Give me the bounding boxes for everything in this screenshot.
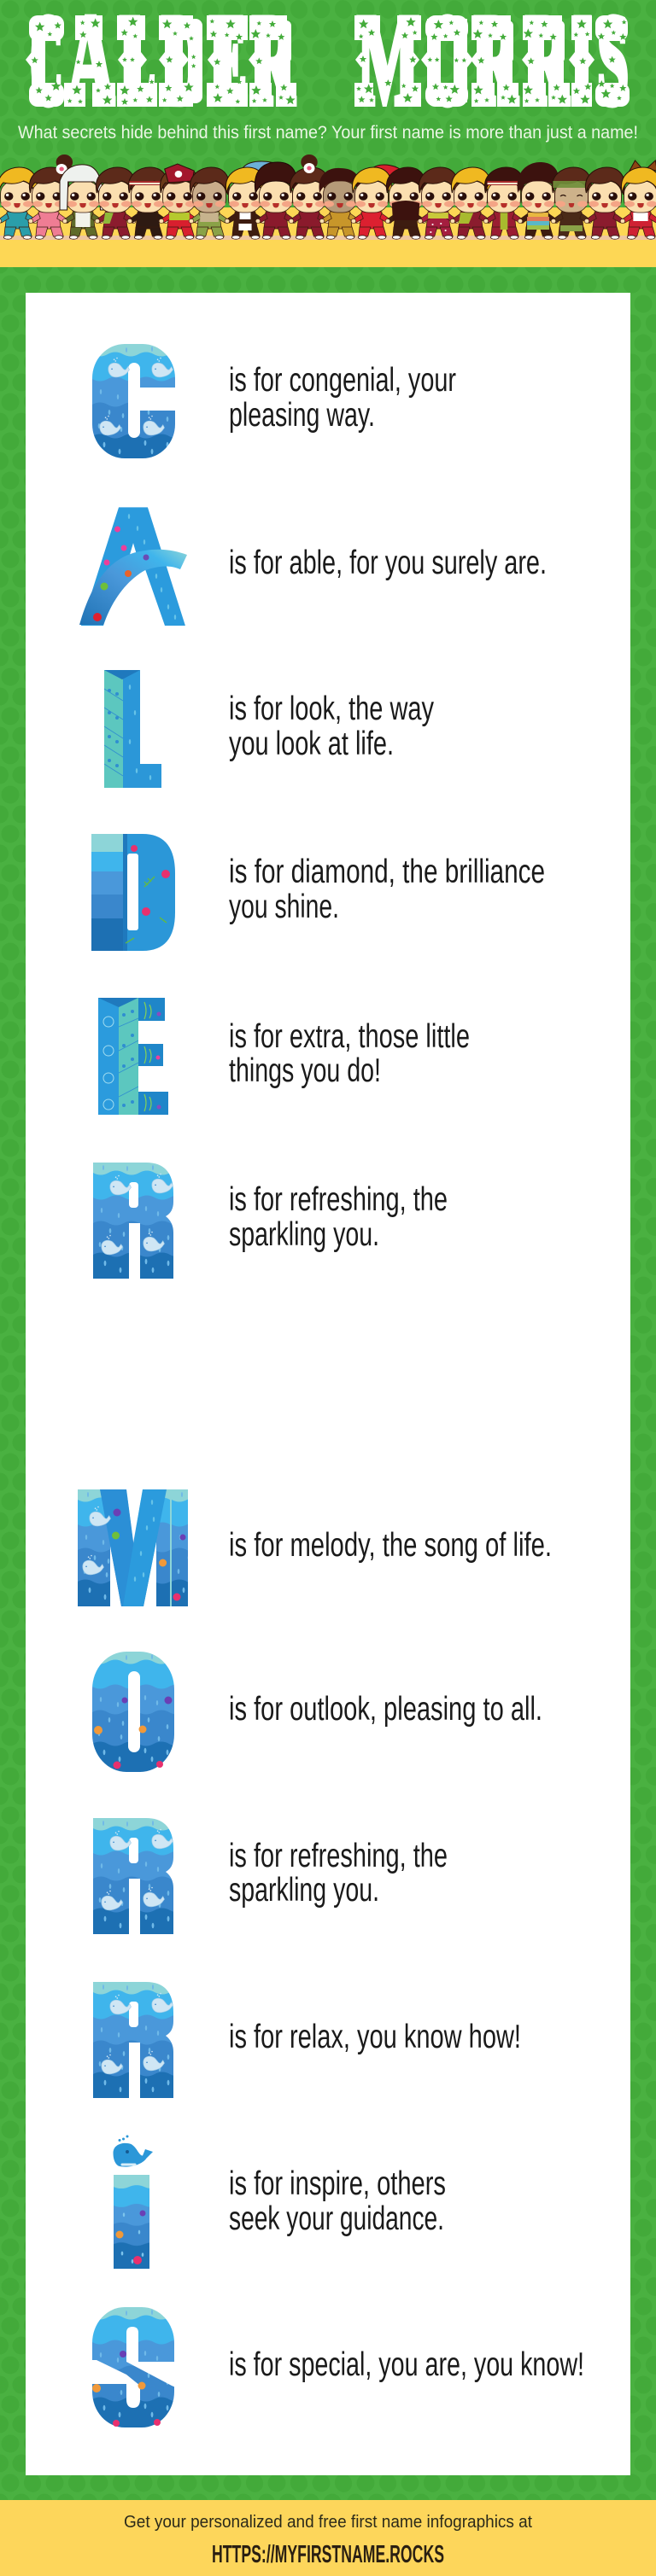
- text: R: [229, 1181, 448, 1253]
- first name: [30, 0, 296, 131]
- character 19: [584, 167, 625, 239]
- text: E: [229, 1018, 470, 1089]
- text: R second: [229, 1838, 448, 1909]
- text: D: you shine.: [229, 889, 339, 925]
- letter R (third): R: [97, 1966, 161, 2123]
- character 13: [385, 167, 426, 239]
- stem: I: [115, 2156, 148, 2290]
- character 12: [351, 165, 403, 239]
- text: R third: is for relax, you know how!: [229, 2019, 521, 2055]
- yellow band: [0, 207, 656, 267]
- text: C: [229, 362, 456, 434]
- character 20: [620, 160, 656, 239]
- floor strip: [0, 236, 656, 240]
- text: I: seek your guidance.: [229, 2200, 444, 2237]
- letter S: S: [101, 2300, 166, 2444]
- text: R second: sparkling you.: [229, 1872, 379, 1909]
- letter A: A: [83, 477, 184, 656]
- text: C: pleasing way.: [229, 397, 375, 434]
- letter L: L: [104, 668, 157, 812]
- letter R: R: [97, 1146, 161, 1303]
- text: E: things you do!: [229, 1052, 381, 1089]
- character 10: [289, 154, 330, 239]
- text: R: is for refreshing, the: [229, 1181, 448, 1218]
- title slab letter forms: [26, 15, 630, 107]
- character 18: [551, 167, 592, 239]
- text: O: is for outlook, pleasing to all.: [229, 1691, 542, 1728]
- banner: parade of characters: [0, 154, 656, 267]
- text: I: is for inspire, others: [229, 2165, 446, 2202]
- letter R (second): R: [97, 1802, 161, 1959]
- text: E: is for extra, those little: [229, 1018, 470, 1055]
- letter I with whale dot: [113, 2136, 153, 2290]
- text: L: [229, 691, 434, 762]
- text: I: [229, 2165, 446, 2237]
- text: A: is for able, for you surely are.: [229, 545, 547, 581]
- footer band: [0, 2500, 656, 2576]
- letter M: M: [76, 1461, 190, 1637]
- character 15: [450, 167, 491, 239]
- main white panel: [26, 293, 630, 2475]
- footer line: Get your personalized and free first name infographics at: [124, 2513, 532, 2532]
- character 5: [127, 167, 168, 239]
- character 8: [225, 161, 280, 239]
- footer url: HTTPS://MYFIRSTNAME.ROCKS: [212, 2541, 444, 2568]
- character 3: [60, 165, 105, 239]
- stars on last name: [356, 17, 627, 104]
- character 14: [418, 167, 459, 239]
- letter O: O: [99, 1646, 167, 1784]
- character 16: [483, 167, 524, 239]
- text: C: is for congenial, your: [229, 362, 456, 399]
- last name: [357, 0, 629, 131]
- character 17: [518, 162, 559, 239]
- character 1: [0, 167, 38, 239]
- text: L: you look at life.: [229, 726, 394, 762]
- stars on first name: [32, 17, 296, 105]
- character 7: [189, 167, 230, 239]
- character 6: [159, 164, 200, 239]
- title: [26, 0, 630, 131]
- text: D: [229, 854, 545, 925]
- icon: blue whale: [113, 2136, 153, 2167]
- letter D: D: [93, 815, 168, 977]
- character 11: [319, 168, 360, 239]
- text: R second: is for refreshing, the: [229, 1838, 448, 1874]
- text: M: is for melody, the song of life.: [229, 1527, 552, 1564]
- character 9: [255, 162, 296, 239]
- character 4: [95, 167, 136, 239]
- text: L: is for look, the way: [229, 691, 434, 727]
- text: R: sparkling you.: [229, 1216, 379, 1253]
- character 2: [28, 154, 73, 239]
- letter E: E: [100, 980, 160, 1142]
- text: D: is for diamond, the brilliance: [229, 854, 545, 890]
- letter C: C: [100, 336, 167, 470]
